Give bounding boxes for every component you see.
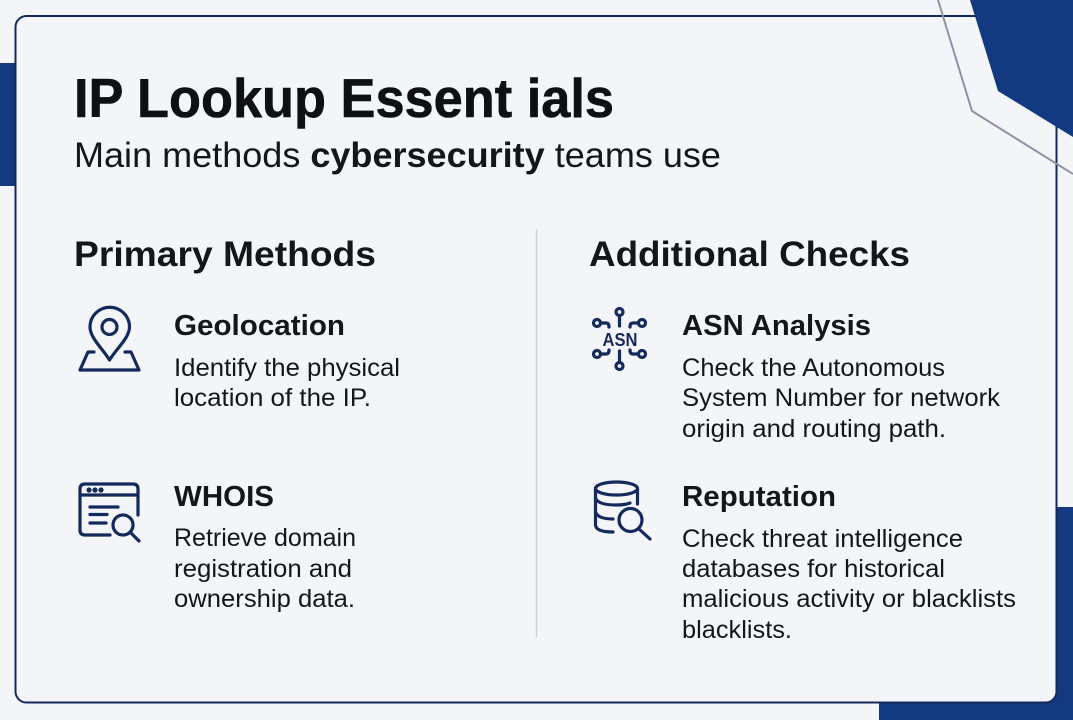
item: whois: Retrieve domain [174,524,356,552]
item: geolocation: Identify the physical [174,354,400,382]
item: whois: registration and [174,555,352,583]
heading: additional checks: Additional Checks [589,235,910,274]
item: asn analysis: System Number for network [682,384,1000,412]
item: geolocation: location of the IP. [174,384,371,412]
title: IP Lookup Essent ials [74,67,614,129]
decorative navy block: left [0,63,30,186]
panel: additional checks [589,235,1016,644]
item: reputation: databases for historical [682,555,945,583]
item: reputation [682,481,1016,644]
item: asn analysis [682,310,1000,443]
item: whois [174,481,356,613]
icon: database with magnifier [596,482,650,539]
column divider [536,229,538,637]
item: whois: ownership data. [174,585,355,613]
item: whois: WHOIS [174,481,274,513]
item: geolocation: Geolocation [174,310,345,342]
top right navy shape [970,0,1073,137]
item: reputation: malicious activity or blacklists [682,585,1016,613]
icon: map pin [80,307,139,370]
decorative navy block: bottom right [879,507,1073,720]
item: asn analysis: ASN Analysis [682,310,871,342]
icon: ASN network [594,308,646,370]
icon: browser window with magnifier [80,484,139,541]
item: reputation: blacklists. [682,616,792,644]
item: reputation: Check threat intelligence [682,525,963,553]
item: asn analysis: Check the Autonomous [682,354,945,382]
item: geolocation [174,310,400,412]
subtitle: Main methods cybersecurity teams use [74,136,721,175]
icon: ASN network: ASN [602,330,638,350]
heading: primary methods: Primary Methods [74,235,376,274]
decorative grey angled line [938,0,1073,174]
item: reputation: Reputation [682,481,836,513]
panel: primary methods [74,235,400,613]
item: asn analysis: origin and routing path. [682,415,946,443]
